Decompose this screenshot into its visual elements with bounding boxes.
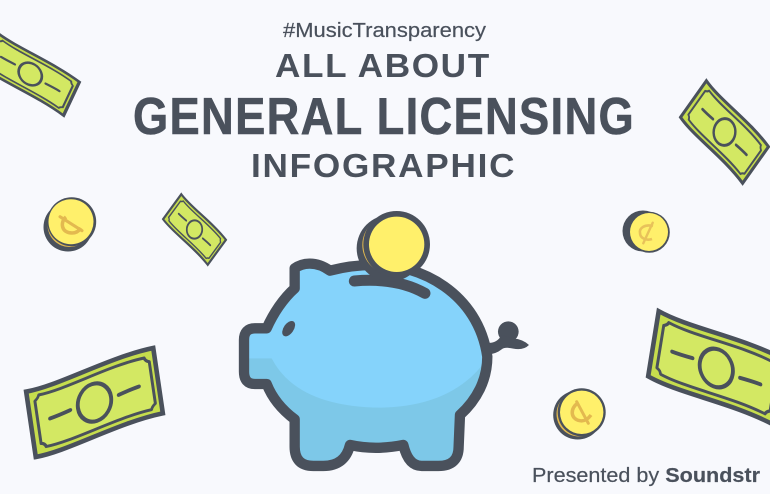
pig eye xyxy=(280,319,298,339)
icon: coin right xyxy=(622,210,670,253)
pig outline xyxy=(244,264,487,466)
coin slot xyxy=(354,280,425,293)
title: general licensing: GENERAL LICENSING xyxy=(133,88,634,146)
pig tail xyxy=(487,321,529,354)
pig body xyxy=(244,264,487,466)
icon: coin bottom xyxy=(553,388,606,440)
title: all about: ALL ABOUT xyxy=(275,48,489,85)
pig highlight xyxy=(249,268,482,408)
title: infographic: INFOGRAPHIC xyxy=(251,148,515,185)
icon: dollar bill top right xyxy=(680,80,769,184)
icon: coin left xyxy=(44,197,96,252)
icon: small dollar bill xyxy=(163,194,226,265)
icon: piggy bank xyxy=(240,211,529,466)
coin in slot xyxy=(357,211,430,282)
hashtag: #MusicTransparency xyxy=(283,20,486,42)
icon: dollar bill bottom left xyxy=(26,346,163,458)
presented by: Presented by Soundstr xyxy=(532,464,760,487)
icon: dollar bill top left xyxy=(0,32,80,116)
icon: dollar bill bottom right xyxy=(648,309,770,426)
